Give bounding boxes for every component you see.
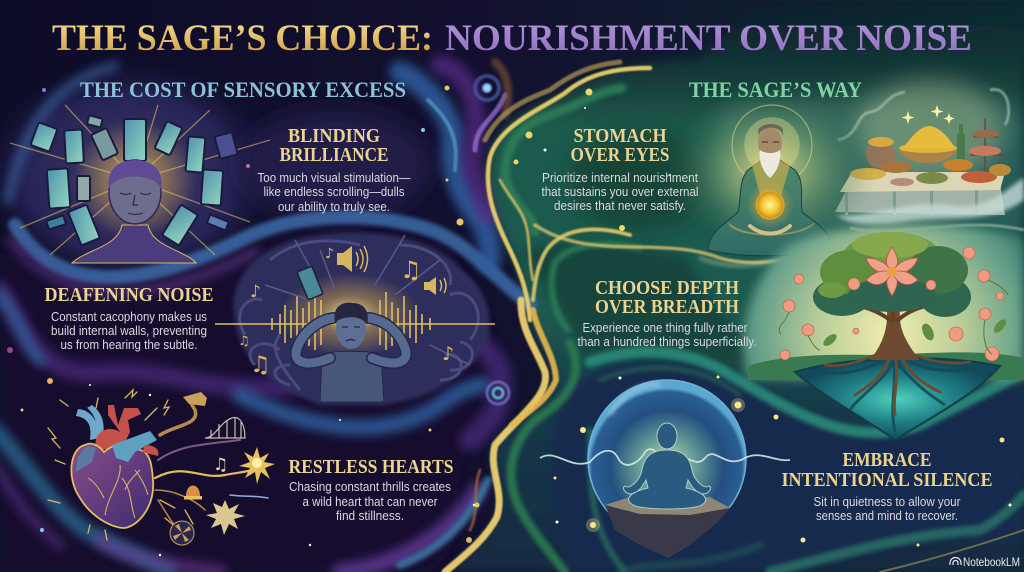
title (52, 18, 972, 59)
text: choose depth over breadth: than a hundred things superficially. (578, 335, 756, 349)
text: restless hearts (288, 457, 454, 523)
text: stomach over eyes: Prioritize internal nourishment (542, 171, 698, 185)
text: embrace intentional silence: INTENTIONAL SILENCE (782, 470, 992, 491)
text: stomach over eyes (542, 126, 698, 213)
text: choose depth over breadth: OVER BREADTH (595, 297, 739, 318)
illustration: person covering ears amid noise (215, 233, 495, 405)
illustration: restless heart and thrills: ♫ (213, 455, 228, 475)
music notes: ♪ (325, 246, 334, 262)
text: stomach over eyes: desires that never satisfy. (554, 199, 686, 213)
title: NOURISHMENT OVER NOISE (445, 18, 972, 59)
music notes: ♫ (238, 334, 250, 349)
text: blinding brilliance: like endless scrolling—dulls (264, 185, 404, 199)
text: blinding brilliance: BRILLIANCE (280, 145, 388, 166)
text: embrace intentional silence (782, 450, 992, 523)
text: deafening noise: build internal walls, preventing (51, 324, 207, 338)
music notes: ♫ (250, 352, 271, 378)
illustration: restless heart and thrills (48, 390, 275, 545)
text: blinding brilliance (258, 126, 411, 214)
text: deafening noise: Constant cacophony makes us (51, 310, 207, 324)
text: stomach over eyes: that sustains you over external (542, 185, 698, 199)
music notes: ♫ (400, 256, 422, 284)
text: restless hearts: RESTLESS HEARTS (288, 457, 454, 478)
text: embrace intentional silence: Sit in quietness to allow your (814, 495, 960, 509)
text: stomach over eyes: STOMACH (574, 126, 666, 147)
text: embrace intentional silence: EMBRACE (842, 450, 932, 471)
text: choose depth over breadth (578, 278, 756, 349)
text: embrace intentional silence: senses and mind to recover. (816, 509, 958, 523)
text: deafening noise: DEAFENING NOISE (44, 285, 214, 306)
text: restless hearts: find stillness. (336, 509, 404, 523)
text: deafening noise: us from hearing the subtle. (60, 338, 198, 352)
text: deafening noise (44, 285, 214, 352)
nebula ribbons: left side (0, 62, 530, 572)
illustration: head surrounded by phones (10, 105, 270, 263)
illustration: meditating figure in a bubble (540, 380, 790, 558)
text: blinding brilliance: BLINDING (288, 126, 380, 147)
illustration: feast table fading into mist (720, 80, 1024, 235)
music notes: ♪ (442, 343, 454, 365)
heading: the sage's way: THE SAGE’S WAY (689, 77, 862, 102)
text: blinding brilliance: our ability to truly see. (278, 200, 390, 214)
title: THE SAGE’S CHOICE: (52, 18, 433, 59)
heading: the cost of sensory excess: THE COST OF SENSORY EXCESS (80, 77, 406, 102)
text: restless hearts: a wild heart that can never (302, 495, 438, 509)
music notes: ♪ (250, 282, 261, 302)
text: choose depth over breadth: CHOOSE DEPTH (595, 278, 739, 299)
illustration: tree with deep roots (743, 224, 1024, 440)
text: blinding brilliance: Too much visual stimulation— (258, 171, 411, 185)
music notes (238, 246, 454, 378)
text: stomach over eyes: OVER EYES (570, 145, 670, 166)
text: choose depth over breadth: Experience one thing fully rather (582, 321, 748, 335)
illustration: glowing sage (665, 90, 875, 256)
text: restless hearts: Chasing constant thrills creates (289, 480, 451, 494)
central gold river dividing the two worlds (445, 62, 1024, 572)
